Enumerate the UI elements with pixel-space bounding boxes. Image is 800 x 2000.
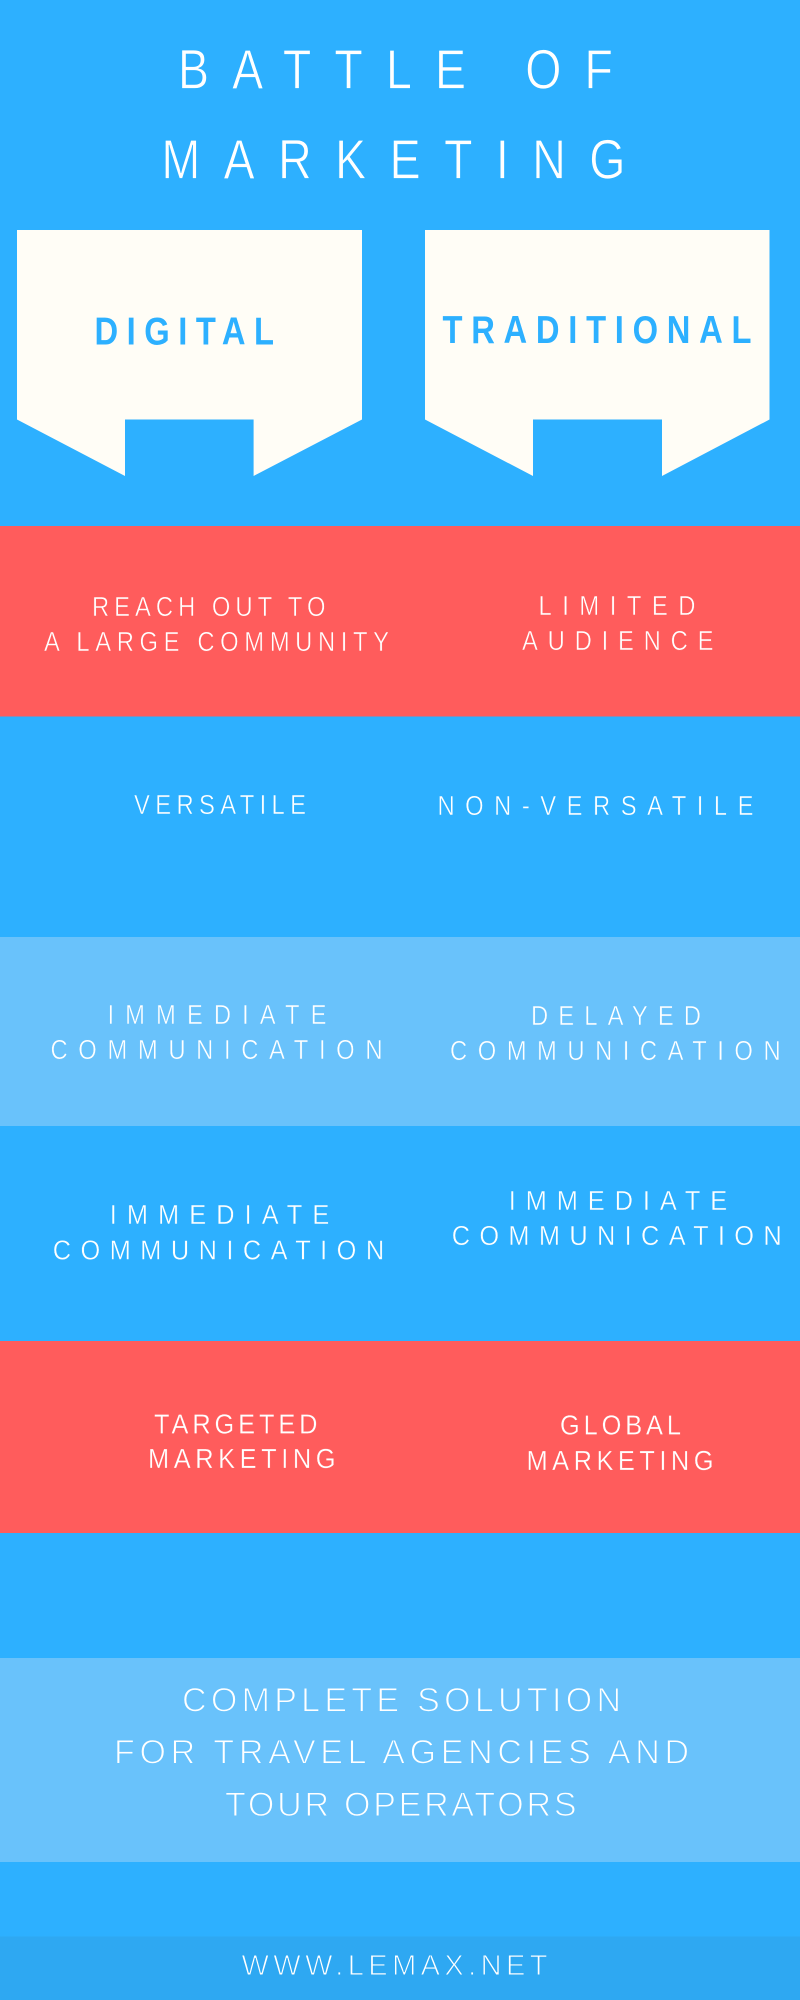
text: left immediate communication — [53, 1199, 384, 1266]
text: right immediate communication: IMMEDIATE — [509, 1185, 727, 1216]
text: traditional reach: LIMITED — [538, 589, 695, 621]
banner body: digital — [17, 230, 362, 476]
text: left immediate communication: COMMUNICATION — [53, 1235, 384, 1266]
row: audience reach — [0, 526, 800, 716]
title — [162, 37, 625, 190]
text: complete solution: FOR TRAVEL AGENCIES AND — [114, 1734, 689, 1772]
text: immediate communication: IMMEDIATE — [108, 998, 326, 1030]
text: targeted marketing: TARGETED — [154, 1409, 317, 1440]
text: targeted marketing — [148, 1409, 335, 1474]
panel: traditional banner — [425, 230, 770, 476]
text: traditional reach — [522, 589, 714, 656]
title: BATTLE OF — [178, 37, 613, 100]
text: complete solution: COMPLETE SOLUTION — [182, 1682, 621, 1720]
text: targeted marketing: MARKETING — [148, 1443, 335, 1474]
text: versatile: VERSATILE — [134, 788, 306, 820]
text: digital reach: A LARGE COMMUNITY — [44, 625, 389, 657]
heading: traditional: TRADITIONAL — [442, 309, 751, 352]
text: complete solution: TOUR OPERATORS — [225, 1786, 576, 1824]
title: MARKETING — [162, 127, 625, 190]
text: delayed communication: COMMUNICATION — [450, 1034, 781, 1066]
heading: digital: DIGITAL — [94, 310, 274, 353]
panel: solution callout — [0, 1658, 800, 1862]
text: right immediate communication: COMMUNICATION — [452, 1220, 782, 1251]
text: complete solution — [114, 1682, 689, 1824]
text: global marketing: MARKETING — [526, 1445, 714, 1476]
text: digital reach — [44, 590, 389, 657]
text: traditional reach: AUDIENCE — [522, 624, 714, 656]
text: left immediate communication: IMMEDIATE — [110, 1199, 329, 1230]
text: delayed communication — [450, 999, 781, 1066]
text: digital reach: REACH OUT TO — [92, 590, 325, 622]
footer — [0, 1936, 800, 2000]
text: global marketing: GLOBAL — [560, 1410, 681, 1441]
text: delayed communication: DELAYED — [531, 999, 701, 1031]
text: global marketing — [526, 1410, 714, 1476]
row: marketing reach — [0, 1341, 800, 1533]
text: non-versatile: NON-VERSATILE — [438, 789, 754, 821]
text: immediate communication — [50, 998, 383, 1065]
footer url: WWW.LEMAX.NET — [242, 1950, 548, 1982]
text: right immediate communication — [452, 1185, 782, 1251]
row: communication speed — [0, 937, 800, 1126]
row: immediate communication — [53, 1185, 782, 1266]
row: versatility — [134, 788, 754, 821]
text: immediate communication: COMMUNICATION — [50, 1033, 383, 1065]
panel: digital banner — [17, 230, 362, 476]
banner body: traditional — [425, 230, 770, 476]
